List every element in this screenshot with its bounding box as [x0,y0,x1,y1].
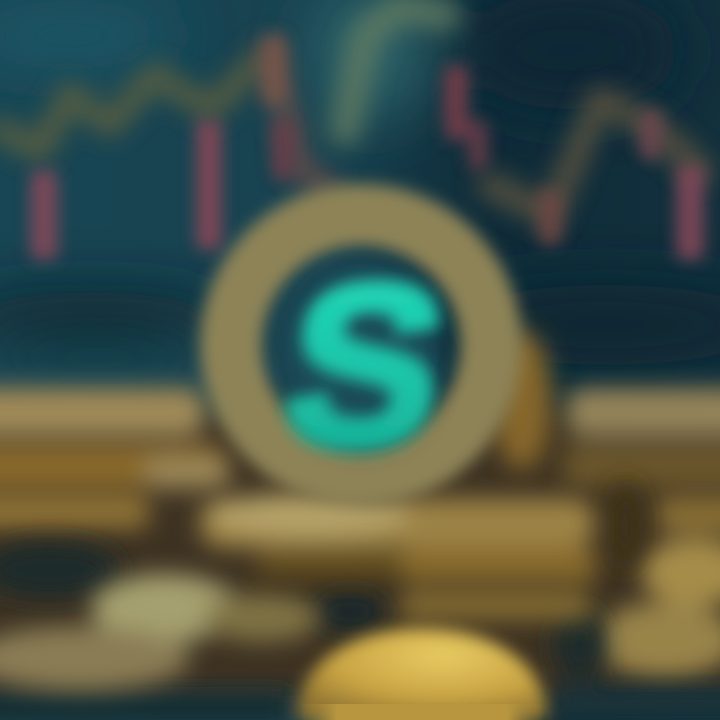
chart line [0,8,700,215]
coin body [296,628,548,720]
coin stacks [0,388,720,720]
large coin [231,215,552,493]
chart: market candles and line [0,8,704,260]
coin foot [300,704,544,720]
right stack [562,388,720,678]
bottom bright coin [296,628,548,720]
left stack [0,388,230,529]
lower left coins [0,574,320,690]
red candles [30,35,704,260]
coin ring [231,215,491,475]
coin centre [286,263,438,447]
centre stack [200,493,598,620]
dark gaps [0,480,720,720]
coin edge [492,330,552,470]
dollar symbol: S [271,238,459,493]
base tone behind stacks [0,410,720,700]
background shadows [0,0,720,381]
